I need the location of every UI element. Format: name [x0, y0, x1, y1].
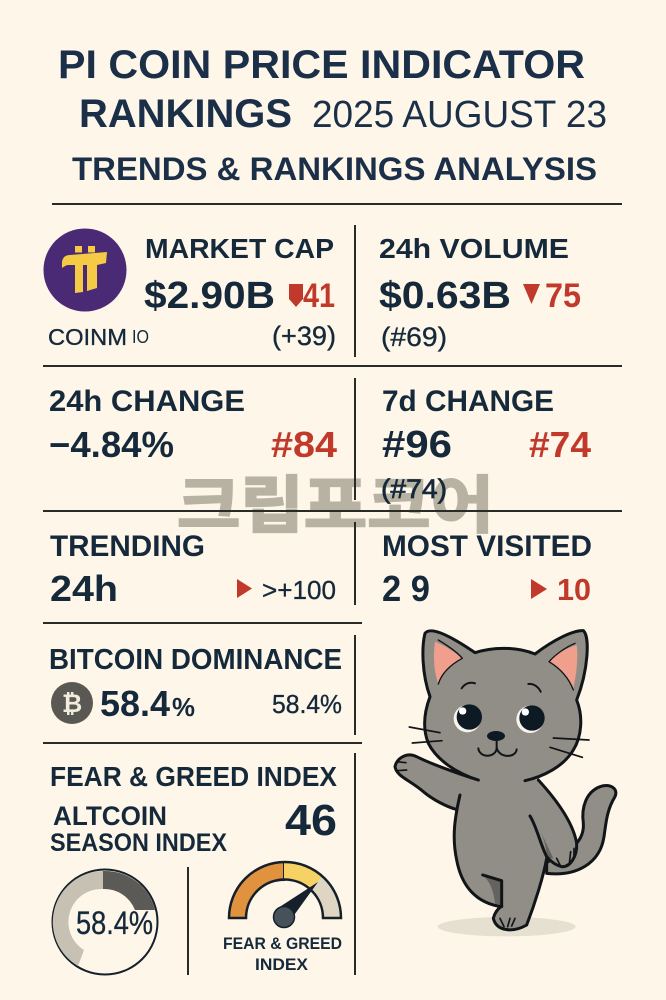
title — [58, 43, 607, 136]
panel: market cap — [44, 228, 336, 351]
panel: 24h change: −4.84% — [49, 424, 174, 465]
icon: right triangle — [531, 579, 547, 599]
chart: fear and greed gauge — [223, 862, 342, 974]
panel: bitcoin dominance: % — [172, 692, 195, 722]
title: 2025 AUGUST 23 — [312, 94, 607, 136]
panel: bitcoin dominance: 58.4% — [272, 689, 342, 719]
panel: market cap: 41 — [303, 277, 335, 315]
panel: bitcoin dominance: 58.4 — [100, 683, 170, 724]
panel: trending: >+100 — [262, 575, 336, 605]
panel: 24h volume: (#69) — [381, 322, 447, 352]
panel: fear and greed: SEASON INDEX — [50, 829, 227, 857]
panel: 24h change: 24h CHANGE — [49, 385, 245, 418]
panel: market cap: (+39) — [272, 321, 336, 351]
panel: fear and greed: ALTCOIN — [53, 801, 167, 831]
panel: 7d change: #74 — [529, 424, 591, 465]
watermark: 크립포코어 — [177, 472, 494, 541]
chart: fear and greed gauge: FEAR & GREED — [223, 934, 342, 953]
panel: most visited: MOST VISITED — [382, 530, 592, 563]
icon: down triangle — [523, 284, 540, 304]
panel: most visited: 10 — [557, 572, 591, 607]
icon: right triangle — [237, 579, 252, 598]
panel: market cap: MARKET CAP — [145, 233, 334, 264]
panel: most visited — [382, 530, 592, 609]
panel: 7d change — [381, 385, 591, 504]
icon: red shield — [289, 284, 303, 307]
chart: altcoin donut: 58.4% — [76, 905, 153, 941]
title: RANKINGS — [79, 92, 292, 136]
panel: 24h change — [49, 385, 337, 465]
panel: 24h change: #84 — [271, 424, 337, 465]
panel: 24h volume: $0.63B — [379, 275, 511, 317]
title: PI COIN PRICE INDICATOR — [58, 43, 585, 87]
panel: fear and greed: 46 — [285, 796, 337, 845]
panel: 24h volume: 24h VOLUME — [379, 233, 569, 264]
panel: 7d change: #96 — [382, 424, 452, 466]
icon: bitcoin badge: ₿ — [62, 690, 82, 718]
panel: 7d change: (#74) — [381, 474, 447, 504]
panel: trending: TRENDING — [50, 530, 205, 563]
panel: fear and greed — [50, 761, 337, 857]
illustration: waving grey cat — [395, 631, 616, 936]
panel: trending — [50, 530, 336, 609]
icon: pi coin logo — [44, 228, 126, 312]
label: coin source: IO — [132, 327, 149, 347]
panel: trending: 24h — [50, 568, 118, 609]
panel: market cap: $2.90B — [144, 275, 275, 317]
panel: bitcoin dominance — [49, 644, 342, 724]
panel: bitcoin dominance: BITCOIN DOMINANCE — [49, 644, 342, 676]
chart: fear and greed gauge: INDEX — [255, 955, 309, 974]
panel: 24h volume — [379, 233, 581, 352]
panel: 7d change: 7d CHANGE — [382, 385, 554, 418]
subtitle: TRENDS & RANKINGS ANALYSIS — [72, 151, 597, 187]
chart: altcoin donut — [52, 870, 158, 974]
panel: 24h volume: 75 — [545, 277, 581, 315]
label: coin source: COINM — [48, 324, 127, 350]
panel: fear and greed: FEAR & GREED INDEX — [50, 761, 337, 792]
panel: most visited: 2 9 — [382, 568, 430, 609]
icon: bitcoin badge — [51, 682, 93, 724]
